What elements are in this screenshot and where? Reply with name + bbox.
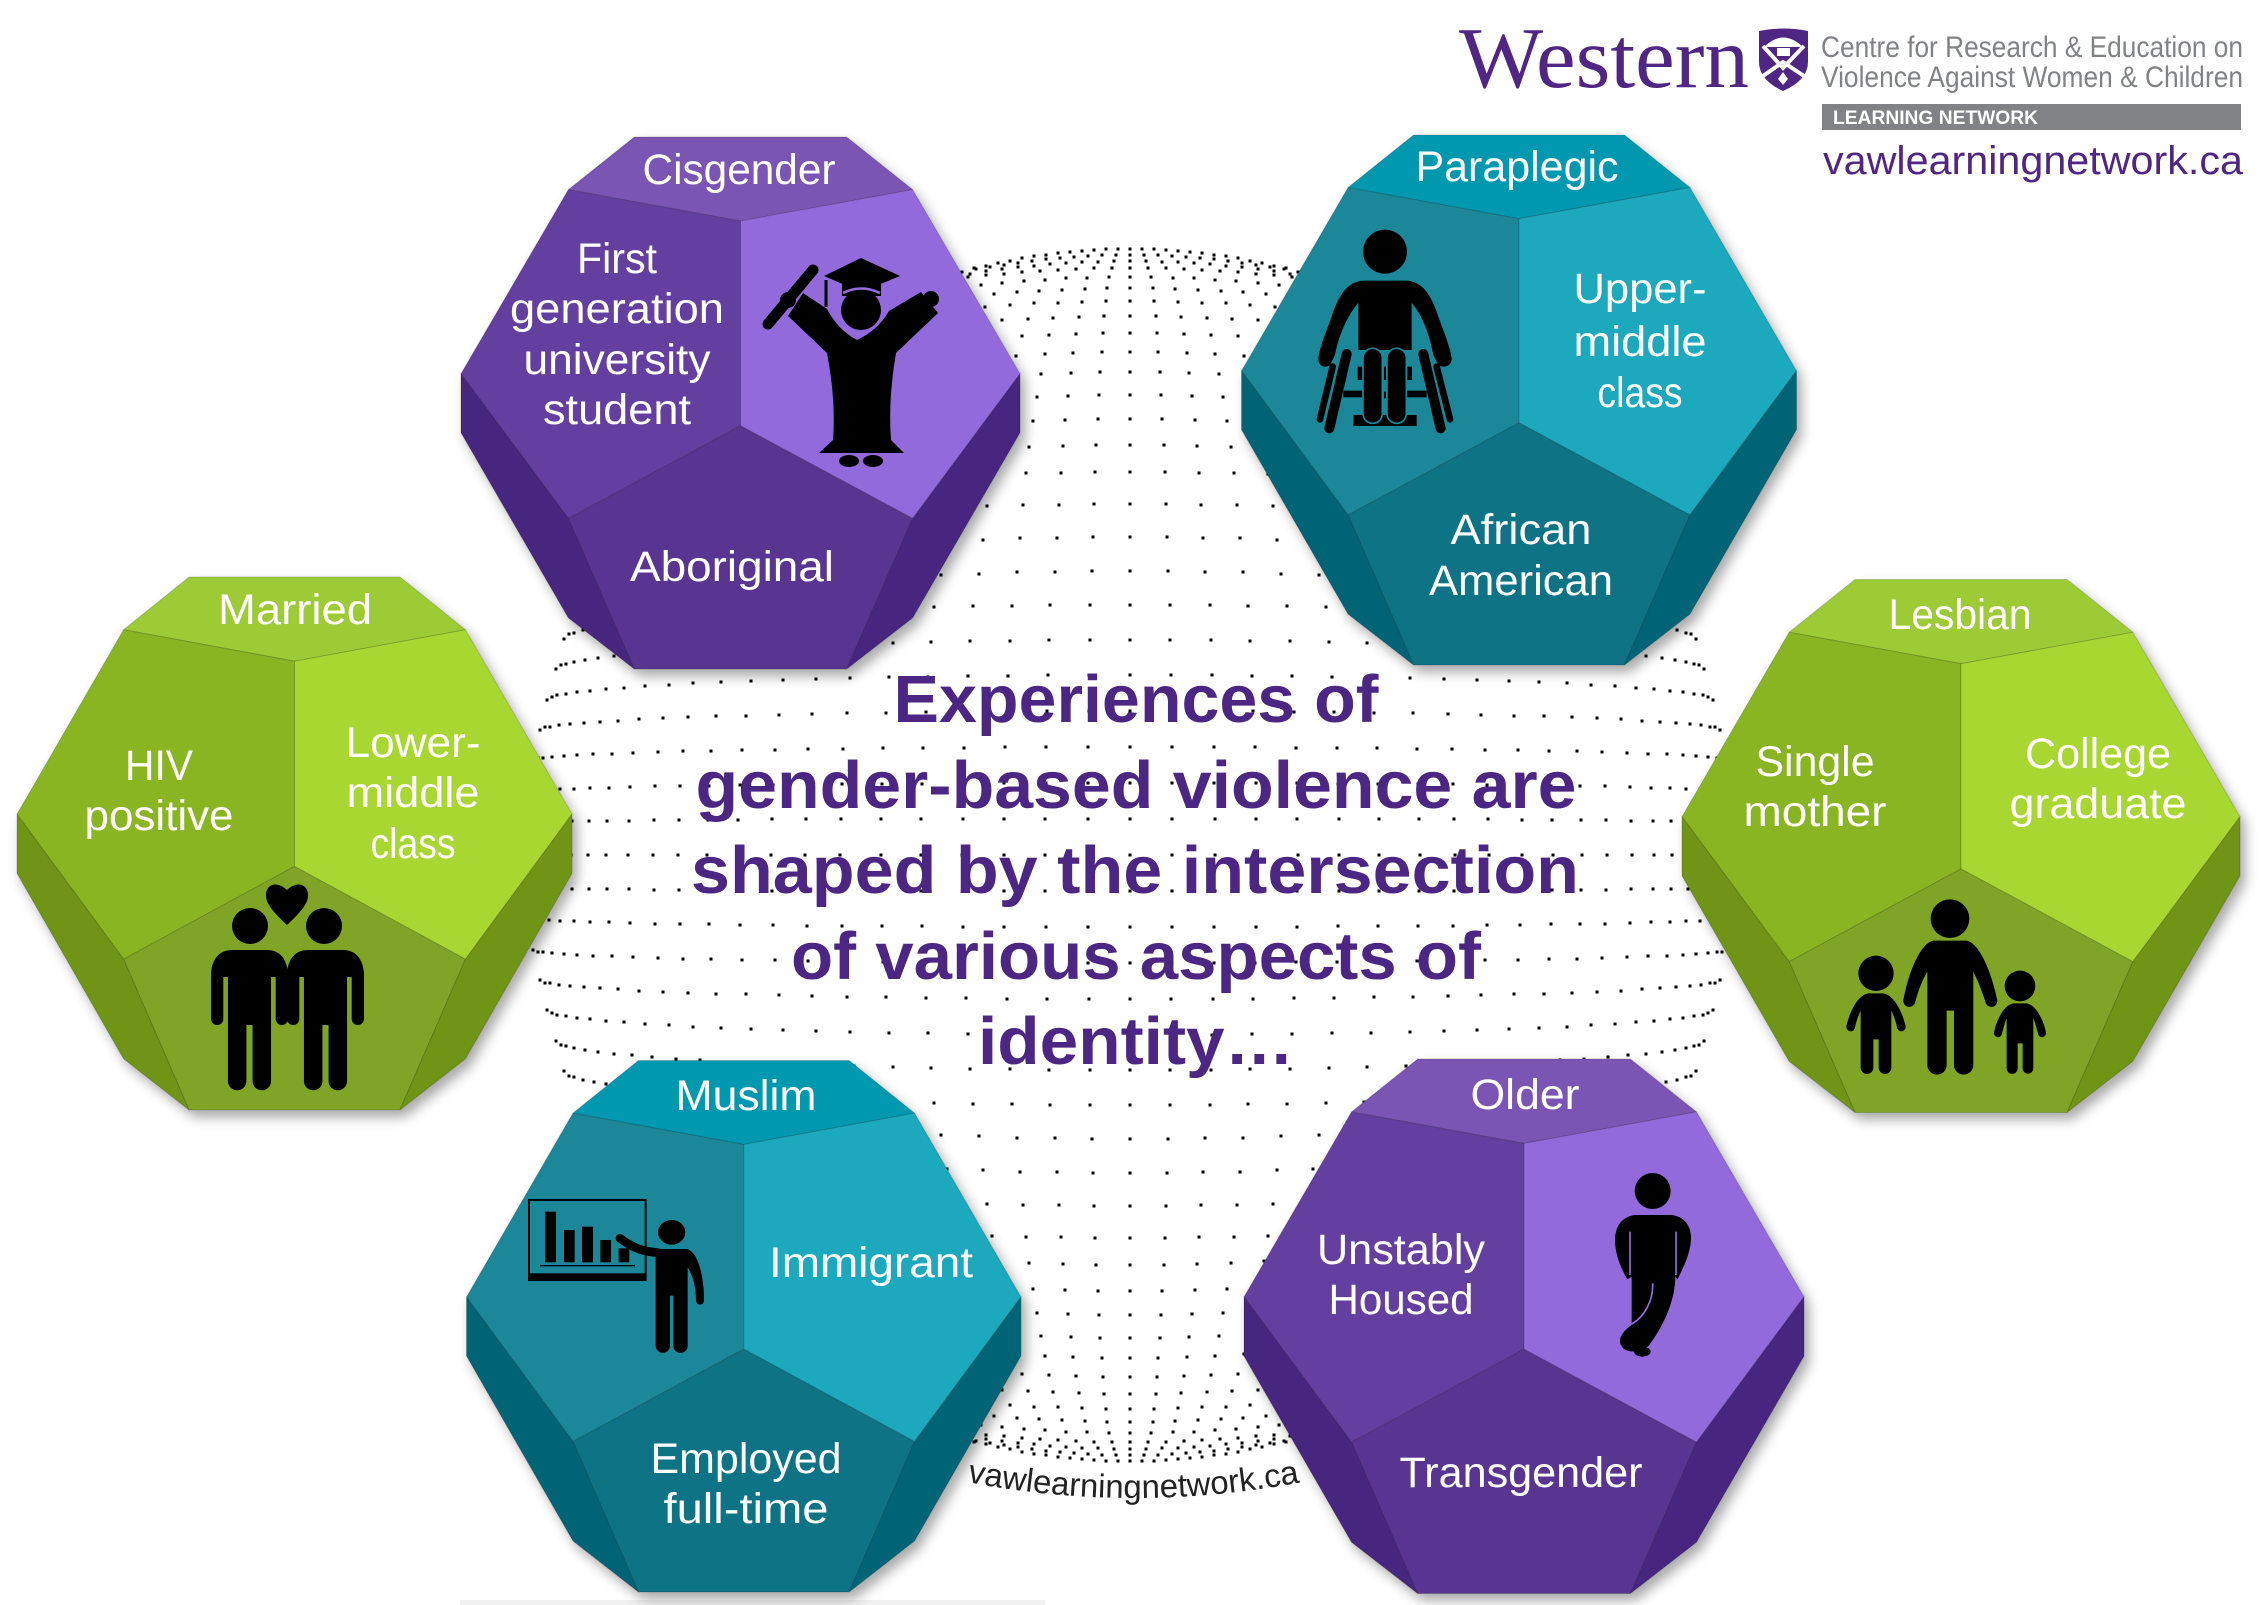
label: Upper-middle class bbox=[1574, 265, 1706, 417]
icon: presenter at chart board bbox=[528, 1200, 704, 1353]
label: African American: American bbox=[1429, 557, 1613, 605]
icon: couple with heart bbox=[211, 885, 364, 1090]
label: Paraplegic: Paraplegic bbox=[1416, 143, 1618, 191]
label: Immigrant: Immigrant bbox=[769, 1239, 973, 1287]
panel: green polyhedron Married bbox=[17, 577, 572, 1110]
label: First generation university student bbox=[510, 235, 724, 434]
label: African American: African bbox=[1450, 506, 1592, 554]
footer streak bbox=[460, 1600, 1045, 1605]
label: First generation university student: university bbox=[524, 336, 711, 384]
panel: purple polyhedron Cisgender bbox=[461, 137, 1020, 669]
label: Single mother: mother bbox=[1744, 788, 1886, 836]
curved website caption: vawlearningnetwork.ca bbox=[970, 1464, 1300, 1505]
label: Lower-middle class bbox=[346, 719, 480, 868]
label: Single mother: Single bbox=[1756, 738, 1874, 786]
icon: graduate bbox=[768, 258, 939, 467]
title: Experiences of bbox=[894, 662, 1379, 737]
icon: older person standing bbox=[1615, 1173, 1691, 1357]
label: Upper-middle class: middle bbox=[1574, 318, 1706, 366]
label: African American bbox=[1429, 506, 1613, 605]
label: Employed full-time: full-time bbox=[664, 1485, 828, 1533]
title: gender-based violence are bbox=[696, 748, 1576, 823]
label: Single mother bbox=[1744, 738, 1886, 836]
label: Employed full-time: Employed bbox=[650, 1435, 842, 1483]
label: Transgender: Transgender bbox=[1400, 1449, 1642, 1497]
label: Upper-middle class: Upper- bbox=[1574, 265, 1706, 313]
title: identity… bbox=[978, 1004, 1294, 1079]
label: Unstably Housed: Housed bbox=[1328, 1276, 1474, 1324]
learning network bar: LEARNING NETWORK bbox=[1833, 108, 2038, 129]
label: Aboriginal: Aboriginal bbox=[630, 543, 834, 591]
label: Lower-middle class: class bbox=[370, 820, 456, 868]
label: Lower-middle class: Lower- bbox=[346, 719, 480, 767]
label: First generation university student: First bbox=[577, 235, 657, 283]
label: Cisgender: Cisgender bbox=[642, 146, 836, 194]
label: First generation university student: generation bbox=[510, 285, 724, 333]
label: Unstably Housed: Unstably bbox=[1317, 1226, 1486, 1274]
icon: person in wheelchair bbox=[1318, 230, 1452, 428]
centre name bbox=[1821, 31, 2243, 94]
panel: green polyhedron Lesbian bbox=[1682, 580, 2240, 1112]
label: College graduate: College bbox=[2025, 730, 2171, 778]
learning network bar bbox=[1822, 104, 2241, 130]
label: HIV positive bbox=[84, 742, 234, 840]
label: HIV positive: HIV bbox=[125, 742, 193, 790]
label: Older: Older bbox=[1470, 1071, 1580, 1119]
label: Upper-middle class: class bbox=[1598, 369, 1682, 417]
icon: shield crest bbox=[1759, 28, 1808, 91]
panel: purple polyhedron Older bbox=[1244, 1059, 1804, 1594]
dotted sphere background bbox=[527, 249, 1733, 1461]
label: First generation university student: student bbox=[543, 386, 691, 434]
logo wordmark: Western: Western bbox=[1459, 9, 1749, 106]
title: of various aspects of bbox=[791, 919, 1482, 994]
label: College graduate bbox=[2010, 730, 2186, 828]
title bbox=[691, 662, 1579, 1079]
label: HIV positive: positive bbox=[84, 792, 234, 840]
icon: parent and two children bbox=[1846, 899, 2046, 1075]
label: Lower-middle class: middle bbox=[346, 769, 480, 817]
logo block bbox=[1459, 9, 2244, 183]
label: Lesbian: Lesbian bbox=[1888, 591, 2032, 639]
title: shaped by the intersection bbox=[691, 833, 1579, 908]
website link: vawlearningnetwork.ca bbox=[1823, 139, 2244, 183]
label: College graduate: graduate bbox=[2010, 780, 2186, 828]
panel: teal polyhedron Muslim bbox=[466, 1060, 1021, 1592]
label: Married: Married bbox=[218, 586, 372, 634]
label: Unstably Housed bbox=[1317, 1226, 1486, 1324]
label: Muslim: Muslim bbox=[676, 1072, 816, 1120]
label: Employed full-time bbox=[650, 1435, 842, 1533]
panel: teal polyhedron Paraplegic bbox=[1242, 135, 1796, 665]
